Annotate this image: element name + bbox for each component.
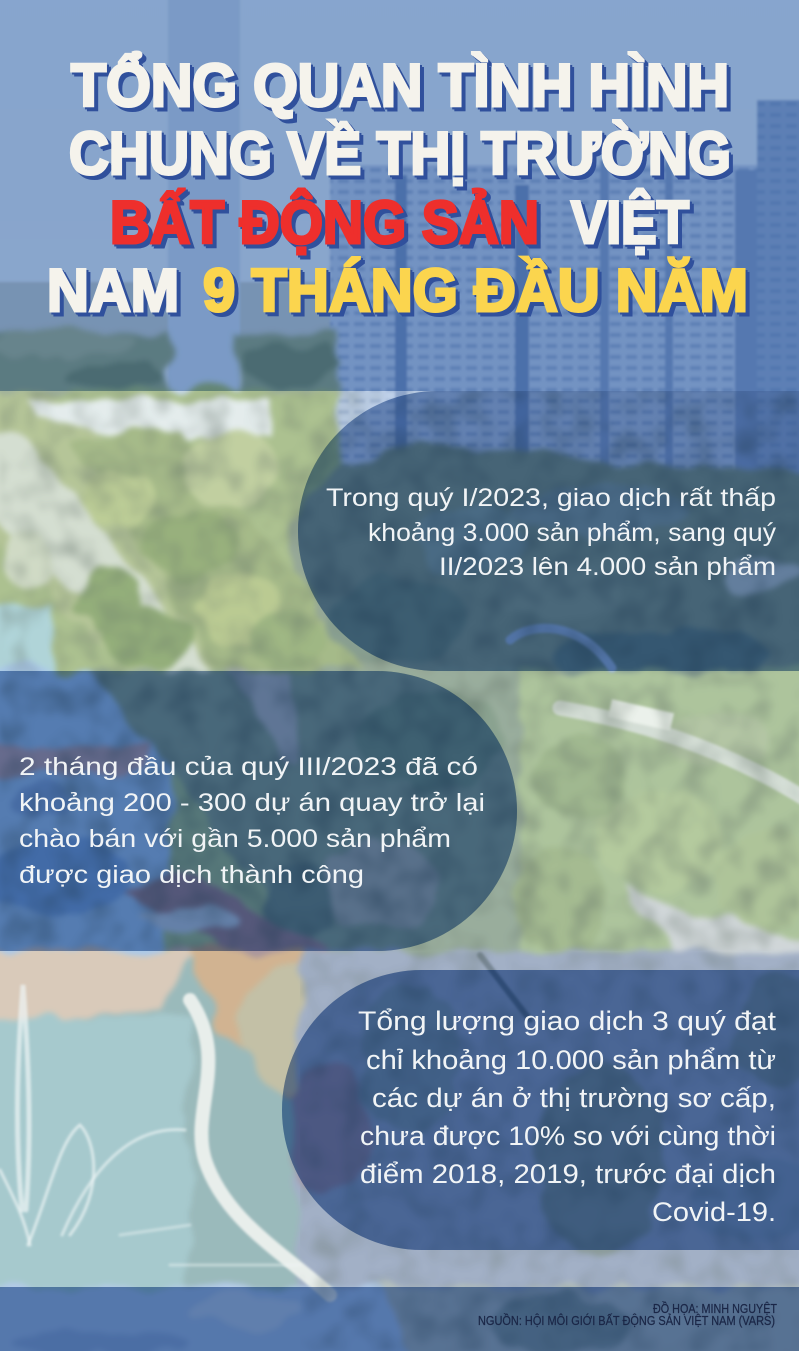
text: nine month total: Covid-19.	[652, 1197, 776, 1227]
footer credits: ĐỒ HỌA: MINH NGUYỆT	[653, 1301, 777, 1316]
text: nine month total: điểm 2018, 2019, trước đại dịch	[360, 1159, 776, 1189]
title: VIỆT	[571, 189, 689, 256]
text: quarter 3	[19, 753, 485, 889]
text: nine month total: chỉ khoảng 10.000 sản phẩm từ	[366, 1045, 776, 1075]
text: quarter 1 and 2: II/2023 lên 4.000 sản phẩm	[439, 553, 776, 581]
footer band	[0, 1287, 799, 1351]
photo: foliage mottling	[0, 391, 799, 1351]
text: quarter 3: được giao dịch thành công	[19, 861, 364, 889]
title: CHUNG VỀ THỊ TRƯỜNG	[69, 120, 731, 187]
footer credits	[478, 1301, 777, 1328]
panel: quarter 1 and 2 transactions	[298, 391, 799, 671]
panel: quarter 3 projects	[0, 671, 517, 951]
photo: park trees and water	[0, 331, 799, 1351]
text: quarter 3: khoảng 200 - 300 dự án quay trở lại	[19, 789, 485, 817]
title: 9 THÁNG ĐẦU NĂM	[203, 257, 748, 324]
title: BẤT ĐỘNG SẢN	[110, 189, 539, 256]
text: quarter 1 and 2: khoảng 3.000 sản phẩm, sang quý	[368, 519, 777, 547]
text: nine month total: chưa được 10% so với cùng thời	[360, 1121, 776, 1151]
text: nine month total: Tổng lượng giao dịch 3 quý đạt	[358, 1006, 777, 1036]
overlay: light wash on the open areas	[0, 391, 799, 1287]
title	[47, 52, 748, 324]
text: nine month total	[358, 1006, 777, 1227]
photo: sky and towers	[0, 0, 799, 500]
photo: fountain jets	[0, 985, 300, 1265]
text: quarter 3: 2 tháng đầu của quý III/2023 đã có	[19, 753, 478, 781]
title: NAM	[47, 257, 179, 324]
text: quarter 3: chào bán với gần 5.000 sản phẩm	[19, 825, 451, 853]
photo: planter curb and road	[190, 628, 799, 1295]
text: nine month total: các dự án ở thị trường sơ cấp,	[372, 1083, 776, 1113]
panel: nine month total	[282, 970, 799, 1250]
title: TỔNG QUAN TÌNH HÌNH	[71, 52, 729, 119]
text: quarter 1 and 2: Trong quý I/2023, giao dịch rất thấp	[326, 484, 776, 512]
overlay: blue tint over the skyline	[0, 0, 799, 391]
text: quarter 1 and 2	[326, 484, 777, 581]
